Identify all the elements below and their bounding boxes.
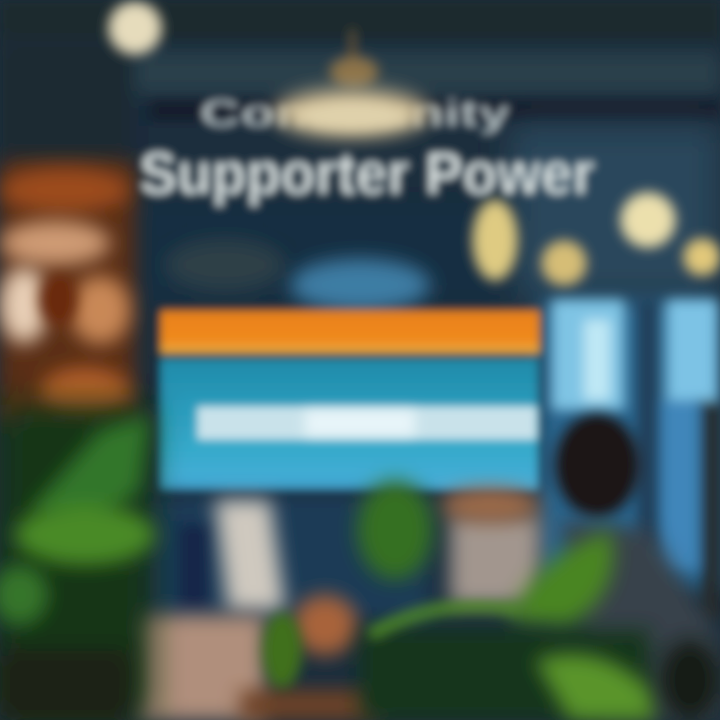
- seated customers and furniture: [135, 487, 540, 720]
- heading subtitle text: Community: [200, 93, 510, 135]
- white text bar: [197, 406, 537, 440]
- windows on right: [552, 300, 720, 620]
- person silhouette: [555, 413, 720, 720]
- heading title text: Supporter Power: [140, 140, 594, 207]
- bookshelf on left: [0, 160, 135, 425]
- teal sign panel: [160, 358, 538, 490]
- plant bottom center: [262, 480, 720, 720]
- plant bottom left: [0, 405, 155, 720]
- orange banner: [160, 310, 540, 354]
- hanging pendant lamp: [274, 30, 430, 137]
- ceiling and wall lights: [109, 2, 720, 285]
